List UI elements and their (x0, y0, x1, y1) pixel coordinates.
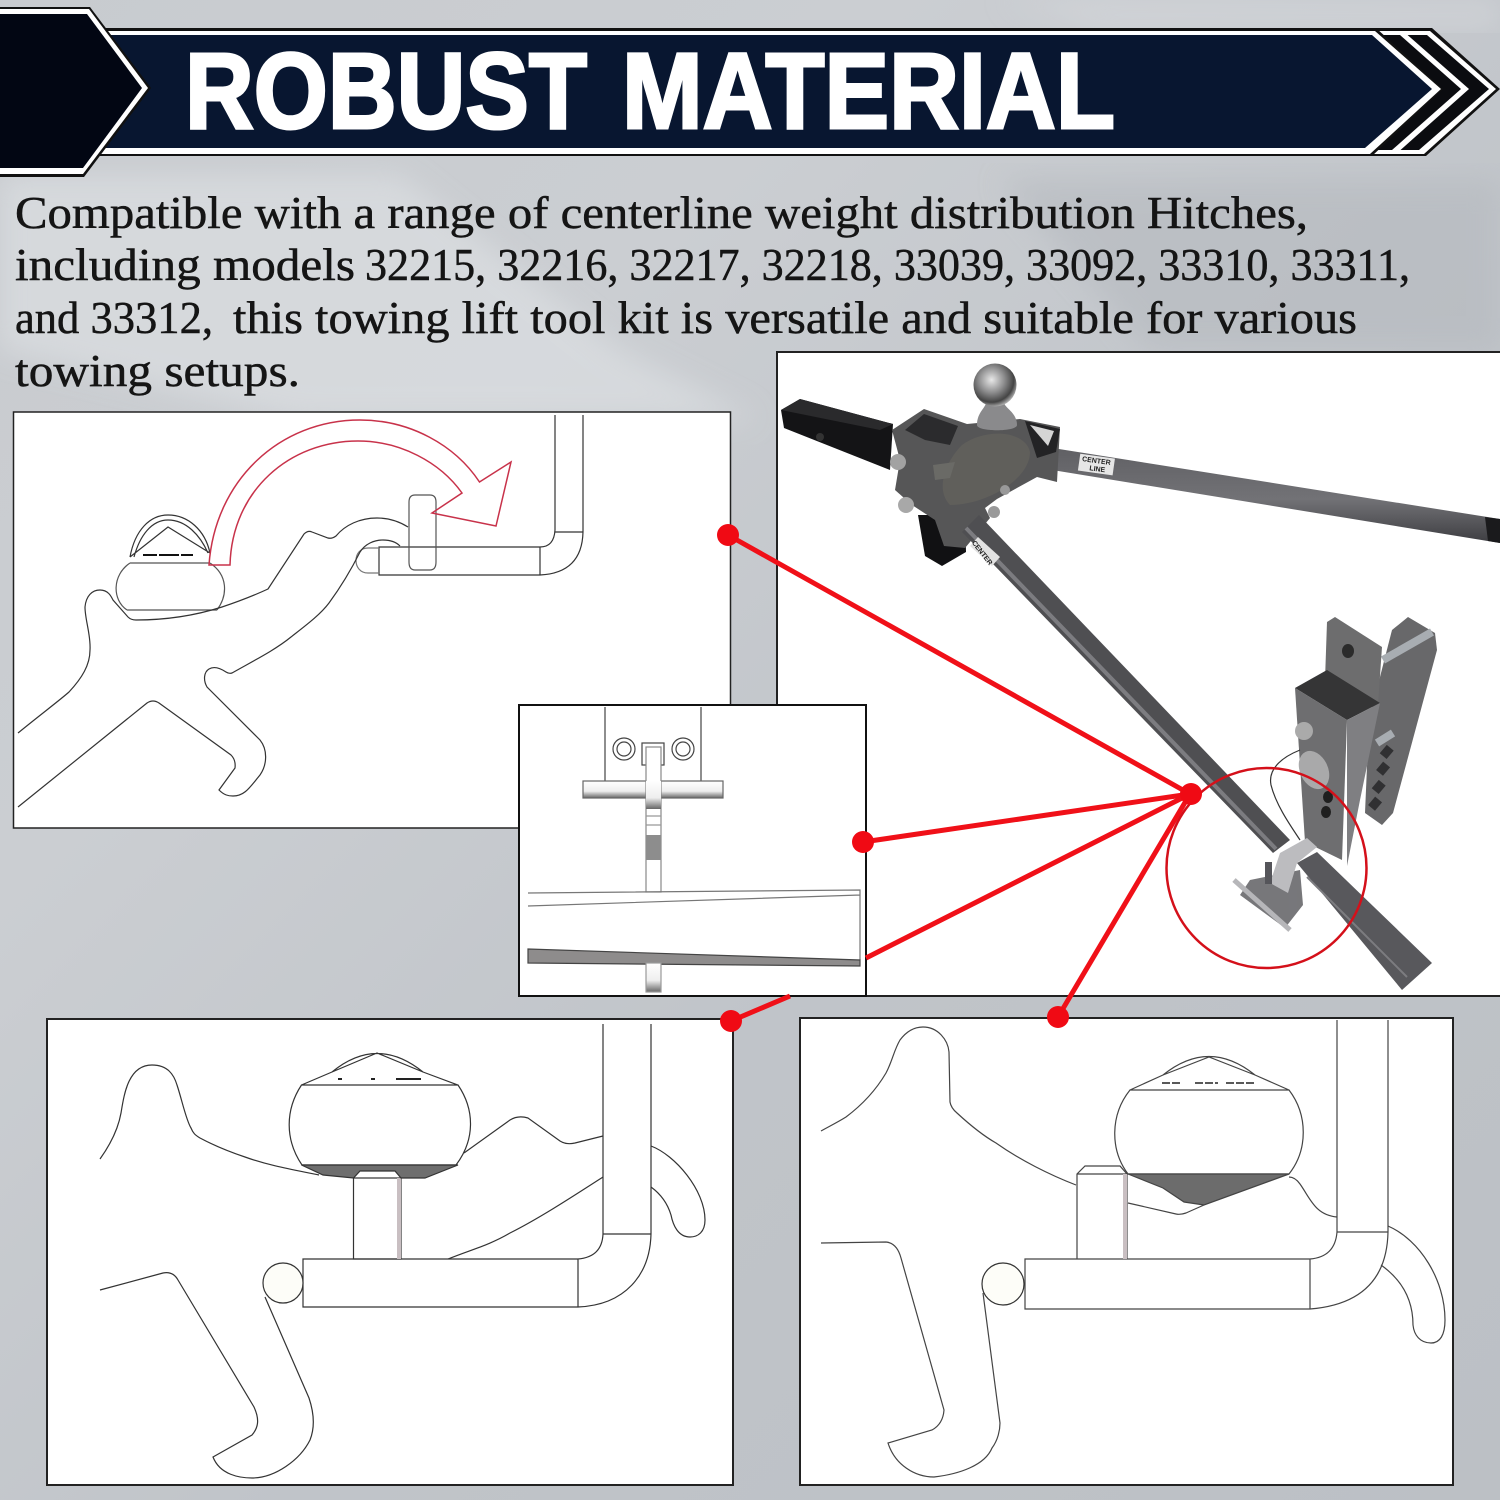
photo: shank (781, 399, 893, 470)
panel: bottom-left diagram (47, 1019, 733, 1485)
roller (263, 1263, 303, 1303)
tube and bar (1025, 1020, 1388, 1309)
locking pin (409, 495, 436, 570)
title (185, 30, 1115, 151)
connector lines (728, 535, 1190, 1021)
tube and bar (379, 415, 583, 575)
roller (982, 1263, 1024, 1305)
roller (356, 548, 379, 573)
panel: top-left diagram (14, 412, 730, 828)
header banner (0, 7, 1500, 177)
connector dots (717, 524, 1202, 1032)
callout circle (1166, 768, 1366, 968)
description text: including models (15, 239, 355, 290)
lower arm outline (18, 540, 400, 807)
photo: upper spring bar: LINE (1089, 465, 1106, 474)
hitch ball (116, 515, 225, 610)
strap (646, 747, 661, 892)
photo: upper spring bar: CENTER (1082, 456, 1111, 467)
description text (15, 187, 1410, 396)
photo: head (890, 409, 1060, 548)
left pentagon (0, 7, 151, 177)
description text: towing setups. (15, 345, 300, 396)
title: ROBUST (185, 30, 587, 151)
title: MATERIAL (622, 30, 1115, 151)
description text: and 33312, (15, 292, 213, 343)
beam (528, 890, 860, 960)
hitch ball (1115, 1056, 1303, 1205)
panel: center diagram (519, 705, 866, 996)
photo: lower receiver (918, 515, 966, 566)
panel: hitch photo (777, 352, 1500, 996)
red arrow (209, 420, 511, 565)
arm outlines (100, 1065, 705, 1478)
description text: 32215, 32216, 32217, 32218, 33039, 33092, 33310, 33311, (365, 239, 1410, 290)
photo: lower spring bar: CENTER (970, 540, 993, 567)
description text: Compatible with a range of centerline weight distribution Hitches, (15, 187, 1308, 238)
photo: upper spring bar (1040, 446, 1500, 543)
photo: clamp (1234, 838, 1317, 930)
tube and bar (303, 1024, 651, 1307)
pin (354, 1178, 401, 1259)
description text: this towing lift tool kit is versatile and suitable for various (233, 292, 1357, 343)
pin (1077, 1166, 1127, 1259)
hitch ball (289, 1053, 471, 1178)
upper arm outline (18, 518, 408, 733)
photo: hitch ball (974, 364, 1017, 430)
panel: bottom-right diagram (800, 1018, 1453, 1485)
photo: square bar end (1297, 852, 1432, 990)
cross bar (583, 781, 723, 798)
arm outlines (821, 1027, 1445, 1477)
photo: lower spring bar (962, 515, 1290, 853)
photo: bracket (1271, 617, 1382, 866)
photo: back plate (1365, 617, 1437, 825)
